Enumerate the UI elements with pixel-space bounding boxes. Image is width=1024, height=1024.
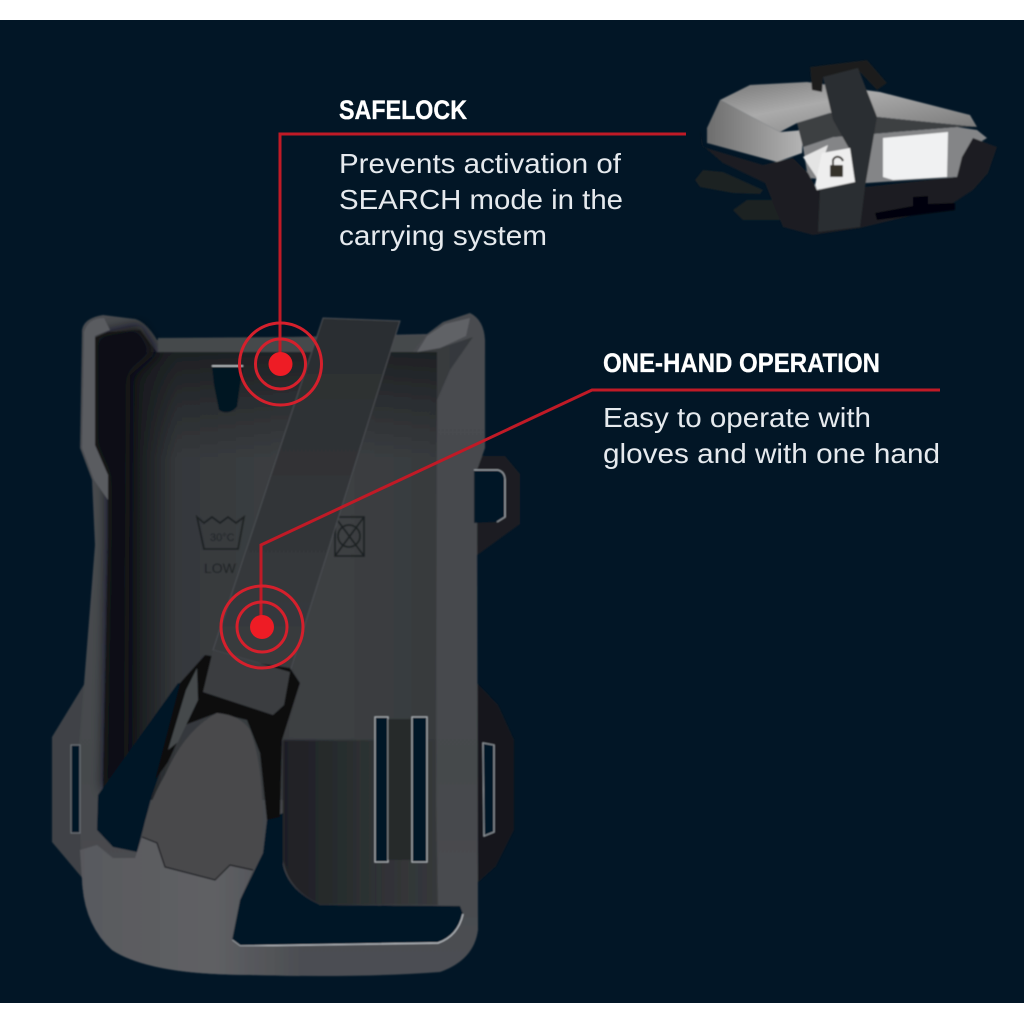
description [603,402,940,469]
leader line [261,390,940,627]
device front face [803,127,987,183]
description: Easy to operate with [603,402,871,433]
dark left wall [95,325,157,790]
description [339,148,623,251]
top right rim [417,318,470,352]
rear foot left [695,170,763,194]
holster shell [78,313,485,976]
black cradle [700,130,997,235]
description: Prevents activation of [339,148,621,179]
right tab hole [474,470,505,523]
left wing [52,678,110,880]
white window [883,132,948,180]
cradle slot [875,196,955,220]
right belt tab [470,456,520,556]
strap slots [375,717,427,862]
heading: ONE-HAND OPERATION [603,348,880,378]
wash care symbols [197,517,364,576]
product photo: device with safelock [695,60,997,235]
leader line [280,134,686,365]
top rim [158,336,425,352]
right wing [476,682,514,884]
unlock tag [815,148,855,190]
description: carrying system [339,220,547,251]
strap over device [818,68,877,232]
left wing slot [71,745,80,833]
buckle highlight [168,668,198,750]
icon: open padlock [830,157,843,177]
callout: one-hand operation [221,348,940,668]
lower pocket shading [283,740,436,905]
strap top loop [810,60,887,92]
right wing slot [483,743,494,836]
top shading [130,352,437,460]
strap band [213,318,400,672]
heading: SAFELOCK [339,95,467,125]
buckle dark body [155,655,300,820]
wash care symbols: 30°C [210,532,235,544]
strap end loop [203,650,290,715]
description: SEARCH mode in the [339,184,623,215]
flap tongue [142,713,263,880]
target marker [221,586,303,668]
callout: safelock [240,95,686,405]
left cutout [97,683,186,852]
lower flap skirt [80,837,300,976]
device left side [707,100,803,162]
device top face [720,82,977,132]
top left rim [82,318,110,500]
bottom cutout [232,813,463,946]
small white window [803,145,828,178]
product photo: carrying holster [52,313,520,976]
label band [797,113,977,147]
description: gloves and with one hand [603,438,940,469]
top notch slot [212,367,243,412]
rear foot right [733,200,780,220]
target marker [240,323,322,405]
wash care symbols: LOW [204,560,237,576]
back panel [94,330,473,905]
